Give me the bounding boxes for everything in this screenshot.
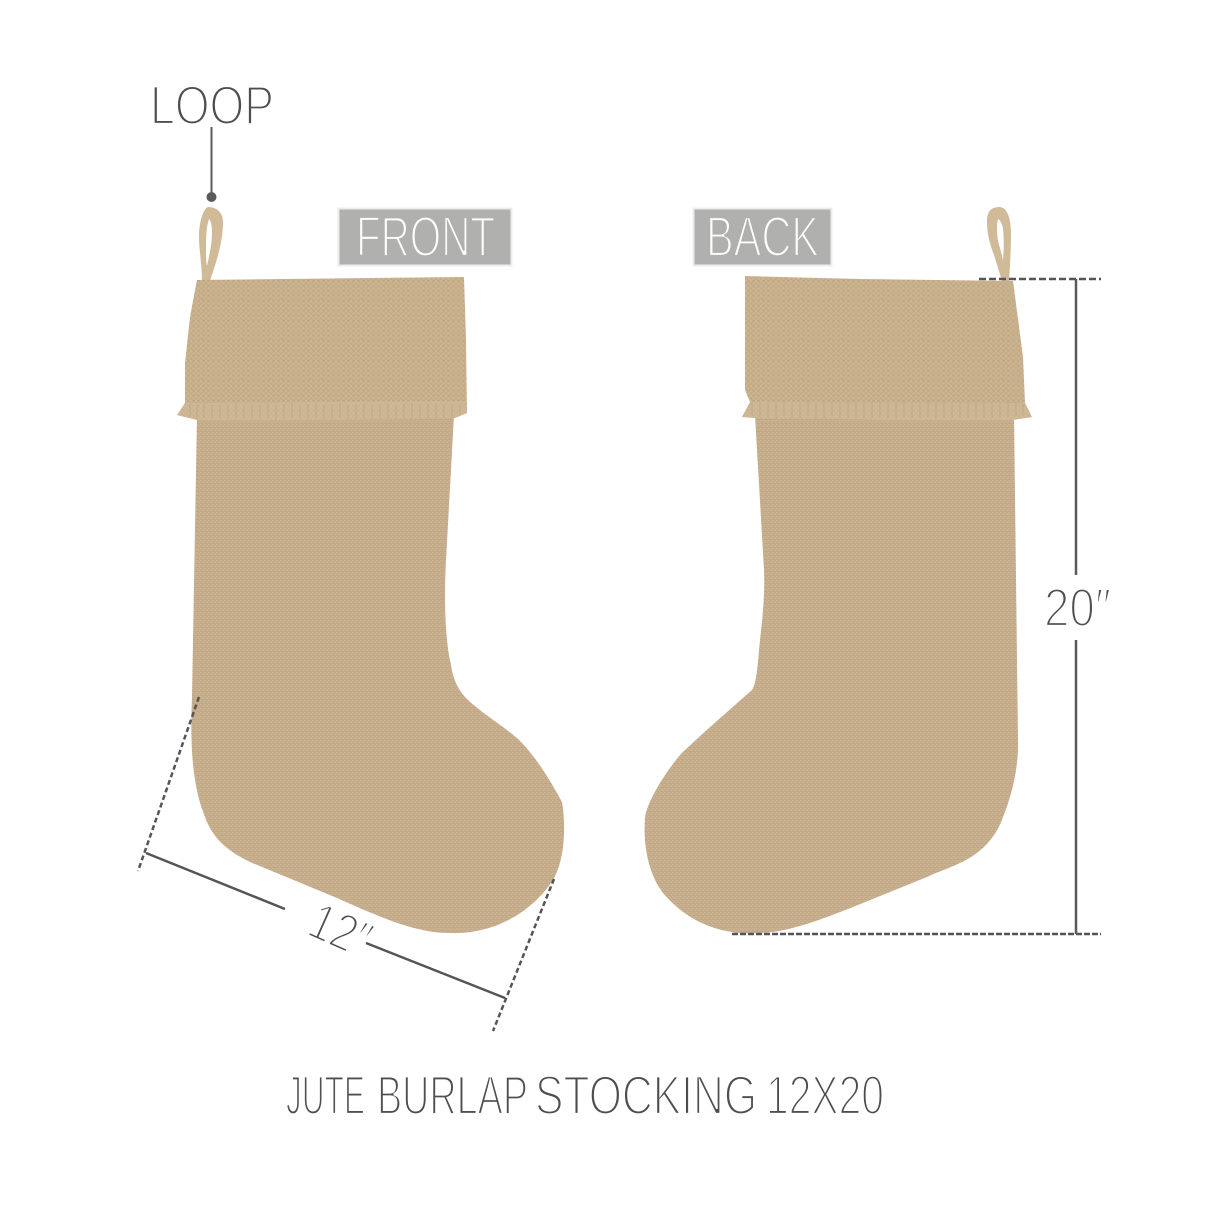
product title: 12X20 [766, 1064, 884, 1126]
width dimension: 12 inches [138, 697, 554, 1031]
back body [645, 415, 1018, 933]
back cuff fringe [742, 401, 1032, 420]
label: LOOP: LOOP [150, 74, 274, 136]
front body [191, 415, 564, 933]
front cuff fringe [177, 401, 467, 420]
loop leader line [206, 127, 216, 202]
front cuff [177, 277, 467, 420]
product title [286, 1064, 884, 1126]
height dimension: 20 inches: 20″ [1044, 578, 1111, 638]
back hanging loop [987, 207, 1011, 281]
front hanging loop [199, 207, 223, 281]
back cuff [742, 276, 1032, 420]
stocking: front [177, 207, 564, 933]
badge: BACK: BACK [706, 205, 819, 269]
product title: JUTE [286, 1064, 365, 1126]
product title: BURLAP [377, 1064, 528, 1126]
badge: FRONT: FRONT [356, 205, 495, 269]
width dimension: 12 inches: 12″ [300, 892, 380, 970]
product title: STOCKING [535, 1064, 757, 1126]
stocking: back [645, 207, 1032, 933]
